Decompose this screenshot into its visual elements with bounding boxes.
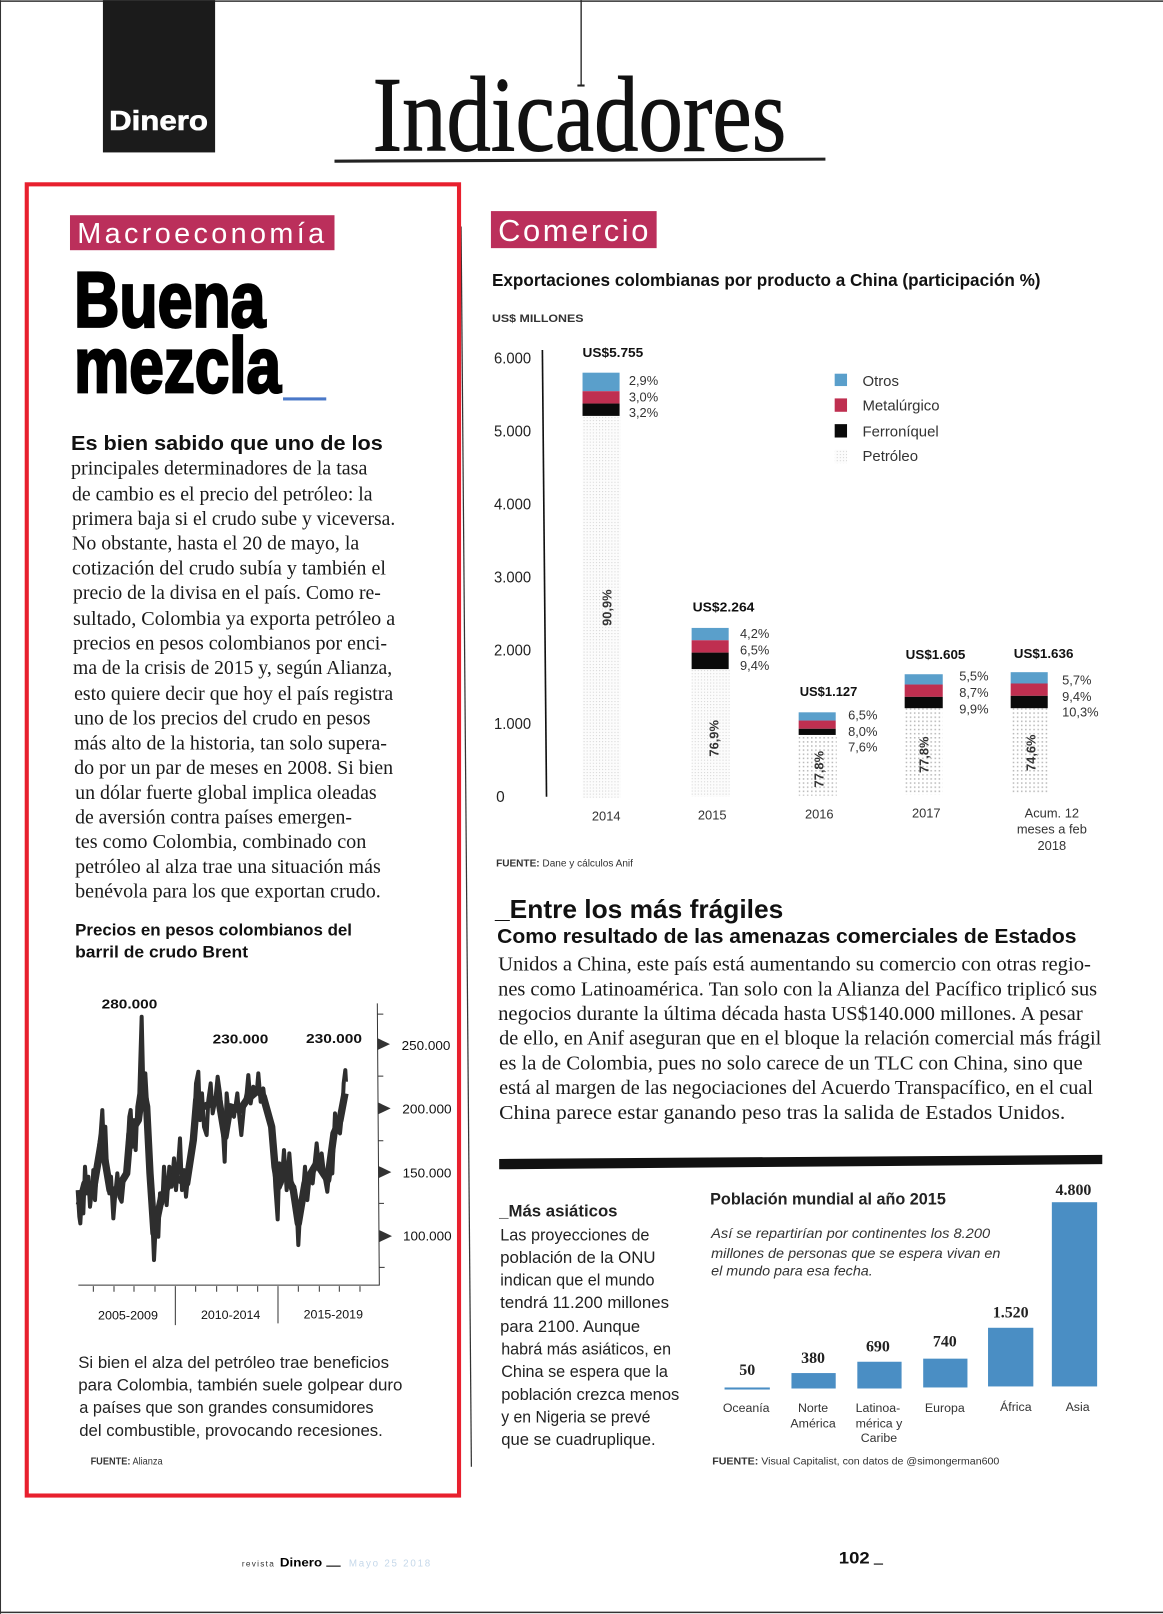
bar: 2015: 4,2% bbox=[740, 626, 769, 641]
chart heading bbox=[75, 921, 352, 961]
peak labels bbox=[102, 997, 362, 1047]
section tab: Dinero bbox=[103, 0, 215, 152]
bar: Latinoamérica y Caribe: Caribe bbox=[861, 1431, 897, 1445]
bar: acumulado 12 meses: 10,3% bbox=[1062, 704, 1099, 719]
column divider bbox=[461, 227, 471, 1467]
intro text block: sultado, Colombia ya exporta petróleo a bbox=[73, 609, 396, 630]
value labels: 150.000 bbox=[403, 1166, 451, 1180]
intro text block: petróleo al alza trae una situación más bbox=[75, 857, 381, 878]
bar: 2017: 2017 bbox=[912, 805, 941, 820]
y axis bbox=[494, 350, 547, 806]
intro text block: No obstante, hasta el 20 de mayo, la bbox=[72, 534, 360, 555]
population chart heading: Población mundial al año 2015 bbox=[710, 1190, 946, 1208]
bar: Latinoamérica y Caribe: Latinoa- bbox=[856, 1401, 900, 1415]
sidebar: Más asiáticos: Las proyecciones de bbox=[500, 1226, 649, 1244]
sidebar: Más asiáticos: para 2100. Aunque bbox=[500, 1318, 640, 1336]
bar: 2017: 5,5% bbox=[959, 668, 989, 683]
intro text block: de cambio es el precio del petróleo: la bbox=[72, 484, 373, 505]
bar: Norte América: América bbox=[790, 1417, 836, 1431]
source: FUENTE: Alianza bbox=[91, 1457, 163, 1468]
legend: Metalúrgico bbox=[862, 398, 940, 415]
bar: Asia: 4.800 bbox=[1056, 1182, 1091, 1199]
axis unit: US$ MILLONES bbox=[492, 313, 584, 325]
bar: Europa: 740 bbox=[933, 1333, 957, 1350]
intro text block: uno de los precios del crudo en pesos bbox=[74, 709, 371, 730]
bar: África: África bbox=[1000, 1399, 1032, 1414]
section badge: Macroeconomía: Macroeconomía bbox=[77, 218, 325, 250]
article: Entre los más frágiles: Como resultado de las amenazas comerciales de Estados bbox=[497, 926, 1077, 948]
sidebar: Más asiáticos: población de la ONU bbox=[500, 1249, 656, 1267]
sidebar: Más asiáticos: China se espera que la bbox=[501, 1363, 669, 1381]
panel: Macroeconomía bbox=[27, 184, 459, 1496]
bar: Europa: Europa bbox=[925, 1401, 965, 1415]
bar: Oceanía bbox=[723, 1362, 770, 1415]
intro text block: un dólar fuerte global implica oleadas bbox=[75, 783, 377, 804]
bar: Norte América: 380 bbox=[801, 1350, 825, 1367]
headline: Buena bbox=[74, 255, 266, 343]
value labels: 250.000 bbox=[402, 1039, 450, 1053]
y axis: 6.000 bbox=[494, 350, 531, 367]
bar: acumulado 12 meses: 74,6% bbox=[1023, 734, 1038, 771]
bar: 2014: 2,9% bbox=[629, 373, 658, 388]
article: Entre los más frágiles: Unidos a China, este país está aumentando su comercio con otras regio- bbox=[498, 955, 1091, 976]
y axis: 1.000 bbox=[494, 716, 531, 733]
footer: Dinero bbox=[280, 1556, 322, 1570]
bar: Norte América: Norte bbox=[798, 1401, 828, 1415]
panel: Comercio bbox=[491, 211, 1102, 1468]
chart caption: para Colombia, también suele golpear duro bbox=[78, 1377, 402, 1395]
article: Entre los más frágiles: está al margen de las negociaciones del Acuerdo Transpacífico, en el cual bbox=[499, 1078, 1094, 1099]
y axis: 4.000 bbox=[494, 497, 531, 514]
legend: Otros bbox=[862, 373, 899, 390]
bar chart: population bbox=[723, 1182, 1097, 1445]
sidebar: Más asiáticos: que se cuadruplique. bbox=[501, 1431, 656, 1449]
page title bbox=[334, 0, 825, 174]
peak labels: 230.000 bbox=[306, 1031, 362, 1046]
bar: acumulado 12 meses: US$1.636 bbox=[1014, 646, 1073, 661]
line chart: Brent price in pesos bbox=[78, 997, 452, 1325]
bar: Asia: Asia bbox=[1066, 1400, 1090, 1414]
population chart heading bbox=[710, 1190, 1001, 1278]
bar: acumulado 12 meses bbox=[1011, 646, 1099, 853]
peak labels: 230.000 bbox=[213, 1032, 268, 1047]
sidebar: Más asiáticos: población crezca menos bbox=[501, 1386, 679, 1404]
thick divider bbox=[499, 1155, 1102, 1169]
intro text block bbox=[71, 432, 396, 903]
headline bbox=[74, 255, 326, 409]
header bbox=[103, 0, 825, 174]
value labels bbox=[402, 1039, 452, 1244]
bar: acumulado 12 meses: 2018 bbox=[1038, 838, 1066, 853]
intro text block: principales determinadores de la tasa bbox=[71, 459, 368, 480]
sidebar: Más asiáticos: habrá más asiáticos, en bbox=[501, 1341, 671, 1359]
bar: 2015: US$2.264 bbox=[693, 599, 755, 614]
bar: Asia bbox=[1052, 1182, 1097, 1414]
bar: 2017: 9,9% bbox=[959, 701, 989, 716]
bar: acumulado 12 meses: 9,4% bbox=[1062, 689, 1091, 704]
bar: 2014: 3,0% bbox=[629, 389, 658, 404]
bar: 2015: 9,4% bbox=[740, 658, 769, 673]
legend: Ferroníquel bbox=[862, 423, 939, 440]
chart caption: a países que son grandes consumidores bbox=[79, 1399, 374, 1417]
bar: 2017: US$1.605 bbox=[906, 647, 965, 662]
section badge: Comercio: Comercio bbox=[498, 213, 648, 248]
population chart heading: millones de personas que se espera vivan en bbox=[711, 1245, 1001, 1261]
bar: Norte América bbox=[790, 1350, 836, 1431]
chart heading: Precios en pesos colombianos del bbox=[75, 921, 352, 940]
period labels: 2005-2009 bbox=[98, 1308, 158, 1322]
value labels: 200.000 bbox=[402, 1103, 452, 1117]
bar: 2016: 2016 bbox=[805, 806, 834, 821]
y axis: 5.000 bbox=[494, 423, 531, 440]
chart caption bbox=[78, 1354, 402, 1440]
chart heading: barril de crudo Brent bbox=[75, 942, 248, 961]
bar: acumulado 12 meses: 5,7% bbox=[1062, 673, 1091, 688]
bar: 2015 bbox=[692, 599, 769, 822]
bar: 2014: 3,2% bbox=[629, 405, 658, 420]
bar: 2016: 7,6% bbox=[848, 739, 877, 754]
intro text block: esto quiere decir que hoy el país registra bbox=[74, 684, 393, 705]
stacked bar chart bbox=[494, 345, 1099, 853]
y axis: 2.000 bbox=[494, 643, 531, 660]
bar: Latinoamérica y Caribe: 690 bbox=[866, 1338, 890, 1355]
bar: 2017: 8,7% bbox=[959, 685, 989, 700]
intro text block: do por un par de meses en 2008. Si bien bbox=[74, 758, 393, 779]
bar: Latinoamérica y Caribe bbox=[856, 1338, 903, 1445]
bar: Oceanía: Oceanía bbox=[723, 1401, 770, 1415]
source: FUENTE: Dane y cálculos Anif bbox=[496, 859, 633, 870]
bar: 2015: 76,9% bbox=[706, 720, 721, 757]
bar: 2014 bbox=[583, 345, 658, 823]
peak labels: 280.000 bbox=[102, 997, 157, 1012]
bar: 2017 bbox=[905, 647, 989, 820]
intro text block: cotización del crudo subía y también el bbox=[72, 558, 387, 579]
bar: 2016: 6,5% bbox=[848, 708, 877, 723]
article: Entre los más frágiles: de ello, en Anif aseguran que en el bloque la relación comercial más frágil bbox=[499, 1029, 1102, 1050]
intro text block: tes como Colombia, combinado con bbox=[75, 832, 367, 853]
article: Entre los más frágiles: _Entre los más frágiles bbox=[494, 896, 783, 924]
intro text block: precio de la divisa en el país. Como re- bbox=[73, 583, 381, 604]
legend bbox=[835, 373, 940, 465]
bar: Latinoamérica y Caribe: mérica y bbox=[856, 1417, 903, 1431]
population chart heading: el mundo para esa fecha. bbox=[711, 1262, 873, 1278]
intro text block: primera baja si el crudo sube y viceversa. bbox=[72, 509, 395, 530]
chart caption: Si bien el alza del petróleo trae beneficios bbox=[78, 1354, 389, 1372]
legend: Petróleo bbox=[862, 448, 918, 465]
chart caption: del combustible, provocando recesiones. bbox=[79, 1422, 383, 1440]
bar: 2017: 77,8% bbox=[916, 736, 931, 773]
y axis: 3.000 bbox=[494, 570, 531, 587]
chart axes bbox=[78, 1003, 385, 1325]
footer: 102 bbox=[839, 1549, 870, 1567]
axis markers bbox=[377, 1038, 392, 1242]
bar: Oceanía: 50 bbox=[739, 1362, 755, 1379]
bar: 2016: US$1.127 bbox=[800, 684, 857, 699]
bar: 2014: 2014 bbox=[592, 808, 621, 823]
intro text block: benévola para los que exportan crudo. bbox=[75, 882, 381, 903]
bar: 2016 bbox=[799, 684, 877, 821]
bar: África: 1.520 bbox=[993, 1304, 1029, 1321]
source: FUENTE: Visual Capitalist, con datos de @simongerman600 bbox=[712, 1457, 1000, 1468]
bar: acumulado 12 meses: meses a feb bbox=[1017, 822, 1087, 837]
article: Entre los más frágiles bbox=[494, 896, 1102, 1124]
intro text block: de aversión contra países emergen- bbox=[75, 807, 352, 828]
intro text block: ma de la crisis de 2015 y, según Alianza, bbox=[73, 658, 392, 679]
article: Entre los más frágiles: negocios durante la última década hasta US$140.000 millones. A pesar bbox=[498, 1004, 1083, 1025]
sidebar: Más asiáticos: _Más asiáticos bbox=[498, 1203, 618, 1221]
period labels: 2015-2019 bbox=[304, 1307, 363, 1321]
sidebar: Más asiáticos: y en Nigeria se prevé bbox=[501, 1408, 650, 1426]
value labels: 100.000 bbox=[403, 1230, 452, 1244]
article: Entre los más frágiles: nes como Latinoamérica. Tan solo con la Alianza del Pacífico triplicó sus bbox=[498, 979, 1097, 1000]
footer bbox=[242, 1549, 883, 1570]
bar: acumulado 12 meses: Acum. 12 bbox=[1025, 805, 1079, 820]
intro text block: precios en pesos colombianos por enci- bbox=[73, 634, 387, 655]
intro text block: Es bien sabido que uno de los bbox=[71, 432, 383, 455]
bar: 2014: US$5.755 bbox=[583, 345, 643, 360]
bar: 2014: 90,9% bbox=[599, 589, 614, 626]
bar: 2016: 77,8% bbox=[811, 750, 826, 787]
sidebar: Más asiáticos: indican que el mundo bbox=[500, 1272, 655, 1290]
footer: revista bbox=[242, 1560, 274, 1569]
intro text block: más alto de la historia, tan solo supera- bbox=[74, 733, 387, 754]
chart title: Exportaciones colombianas por producto a China (participación %) bbox=[492, 270, 1041, 290]
page title: Indicadores bbox=[373, 56, 786, 174]
sidebar: Más asiáticos bbox=[498, 1203, 679, 1449]
period labels bbox=[98, 1307, 363, 1322]
bar: Europa bbox=[923, 1333, 967, 1415]
bar: 2015: 2015 bbox=[698, 807, 727, 822]
footer: Mayo 25 2018 bbox=[349, 1559, 430, 1570]
bar: 2016: 8,0% bbox=[848, 724, 877, 739]
population chart heading: Así se repartirían por continentes los 8.200 bbox=[710, 1225, 990, 1241]
period labels: 2010-2014 bbox=[201, 1308, 261, 1322]
article: Entre los más frágiles: China parece estar ganando peso tras la salida de Estados Unidos. bbox=[499, 1103, 1065, 1124]
bar: 2015: 6,5% bbox=[740, 643, 769, 658]
bar: África bbox=[988, 1304, 1033, 1414]
section tab: Dinero: Dinero bbox=[109, 105, 208, 136]
headline: mezcla bbox=[74, 321, 281, 409]
y axis: 0 bbox=[496, 789, 505, 806]
article: Entre los más frágiles: es la de Colombia, pues no solo carece de un TLC con China, sino que bbox=[499, 1053, 1083, 1074]
sidebar: Más asiáticos: tendrá 11.200 millones bbox=[500, 1294, 669, 1312]
